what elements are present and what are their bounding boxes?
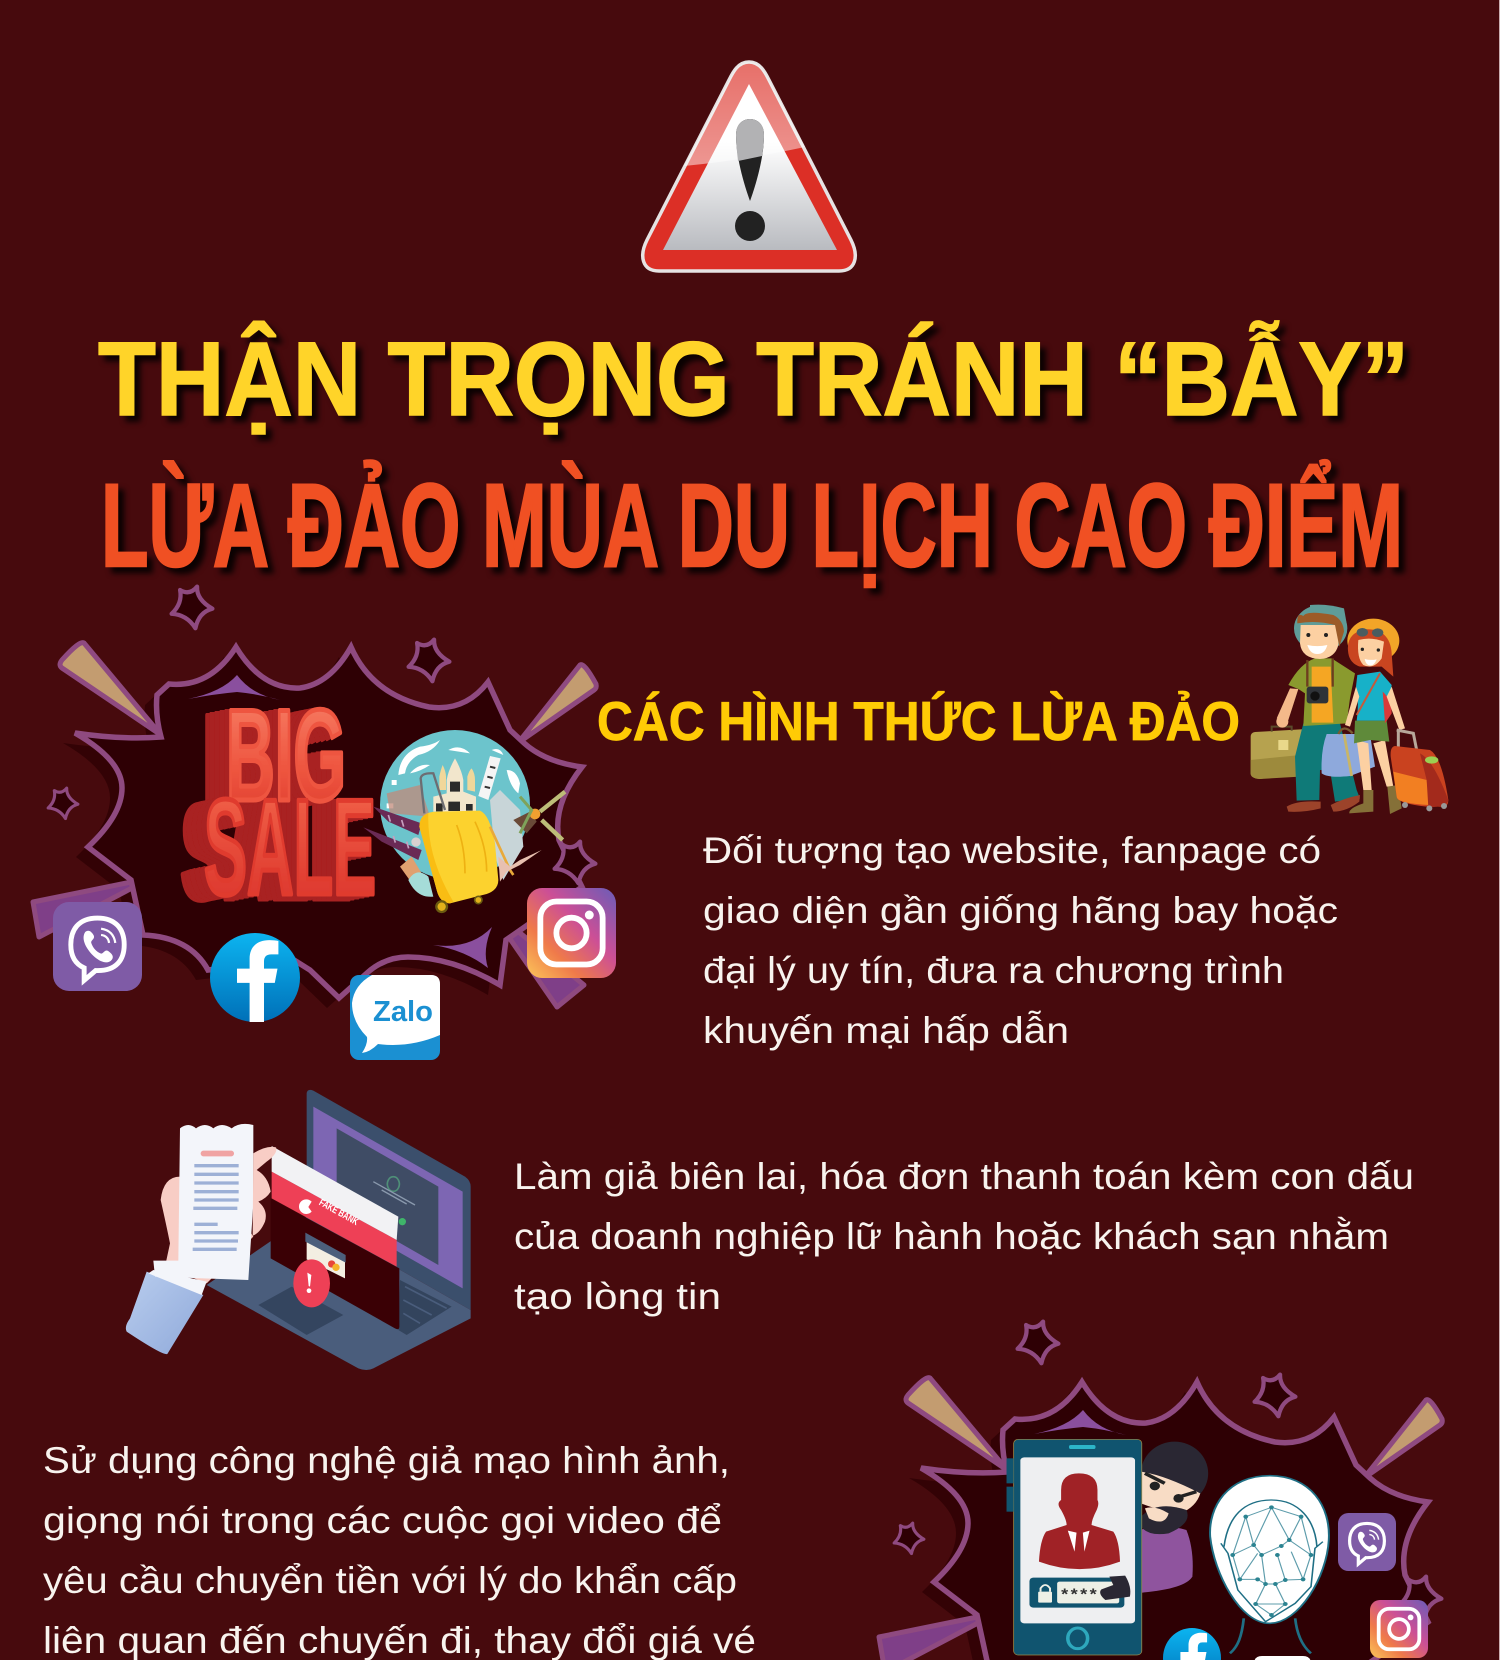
laptop base (207, 1217, 471, 1370)
suitcase (419, 811, 498, 903)
small building (400, 857, 422, 881)
arm (498, 850, 542, 882)
man head (1294, 605, 1347, 652)
travel globe with suitcase (363, 730, 565, 912)
panel: fake receipt and laptop illustration: FAKE BANK (317, 1197, 361, 1228)
icon: viber (1338, 1513, 1396, 1571)
big sale lettering (204, 682, 376, 923)
credit card (307, 1242, 345, 1278)
fingers (253, 1147, 276, 1236)
shopping bag (1322, 734, 1375, 777)
text block: fake websites: Đối tượng tạo website, fanpage có (703, 829, 1321, 871)
panel: big sale illustration (33, 587, 616, 1060)
icon: zalo: Zalo (373, 996, 433, 1028)
comic burst (33, 587, 596, 1008)
lock (1038, 1592, 1052, 1603)
church (433, 758, 476, 812)
panel: fake receipt and laptop illustration (126, 1090, 471, 1370)
text block: forged receipts: tạo lòng tin (514, 1275, 721, 1317)
icon: viber (53, 902, 142, 991)
text block: forged receipts: của doanh nghiệp lữ hành hoặc khách sạn nhằm (514, 1215, 1389, 1257)
text block: deepfake calls: yêu cầu chuyển tiền với lý do khẩn cấp (43, 1559, 737, 1601)
text block: fake websites: đại lý uy tín, đưa ra chương trình (703, 949, 1284, 991)
text block: deepfake calls: giọng nói trong các cuộc gọi video để (43, 1499, 722, 1541)
fake bank browser window (271, 1198, 399, 1329)
text block: deepfake calls (43, 1439, 756, 1660)
password field (1029, 1578, 1124, 1608)
hand (161, 1170, 253, 1283)
icon: facebook (210, 933, 300, 1022)
bridge (387, 785, 430, 817)
text block: forged receipts (514, 1155, 1414, 1317)
icon: traveller couple (1251, 605, 1448, 814)
icon: warning triangle (643, 62, 855, 271)
big sale lettering: BIG (226, 682, 346, 828)
face scan (1210, 1476, 1329, 1623)
panel: big sale illustration: SALE (204, 771, 376, 923)
text block: forged receipts: Làm giả biên lai, hóa đơn thanh toán kèm con dấu (514, 1155, 1414, 1197)
text block: fake websites (703, 829, 1338, 1051)
camera (1307, 687, 1328, 703)
purple towers (363, 807, 422, 860)
man legs (1295, 723, 1360, 802)
leaning tower (478, 756, 501, 800)
title (98, 319, 1409, 592)
woman legs (1357, 740, 1393, 790)
sleeve (126, 1272, 203, 1354)
phone thief and face scan (1007, 1439, 1329, 1655)
icon: zalo (350, 975, 440, 1060)
man shirt (1288, 658, 1355, 726)
icon: instagram (1370, 1600, 1428, 1658)
text block: deepfake calls: Sử dụng công nghệ giả mạo hình ảnh, (43, 1439, 730, 1481)
phone (1014, 1439, 1142, 1655)
opera house (490, 790, 523, 880)
panel: deepfake illustration (879, 1322, 1442, 1660)
comic burst (879, 1322, 1442, 1660)
icon: facebook (1163, 1628, 1221, 1660)
glove (1100, 1576, 1130, 1600)
alert badge (293, 1259, 330, 1307)
suitcase handle (421, 773, 445, 813)
laptop screen (307, 1090, 471, 1310)
windmill (530, 809, 540, 819)
text block: deepfake calls: liên quan đến chuyến đi, thay đổi giá vé (43, 1619, 756, 1660)
woman top (1356, 672, 1392, 721)
receipt (153, 1124, 253, 1280)
text block: fake websites: giao diện gần giống hãng bay hoặc (703, 889, 1338, 931)
icon: zalo (1254, 1656, 1311, 1660)
avatar (1039, 1473, 1120, 1569)
cloud base (408, 872, 433, 897)
woman head (1347, 619, 1399, 663)
red suitcase (1397, 730, 1417, 750)
section heading: CÁC HÌNH THỨC LỪA ĐẢO (597, 690, 1240, 752)
thief (1133, 1527, 1193, 1593)
phone thief and face scan: **** (1061, 1586, 1097, 1603)
tan suitcase (1251, 729, 1317, 779)
text block: fake websites: khuyến mại hấp dẫn (703, 1009, 1069, 1051)
icon: instagram (527, 888, 616, 978)
